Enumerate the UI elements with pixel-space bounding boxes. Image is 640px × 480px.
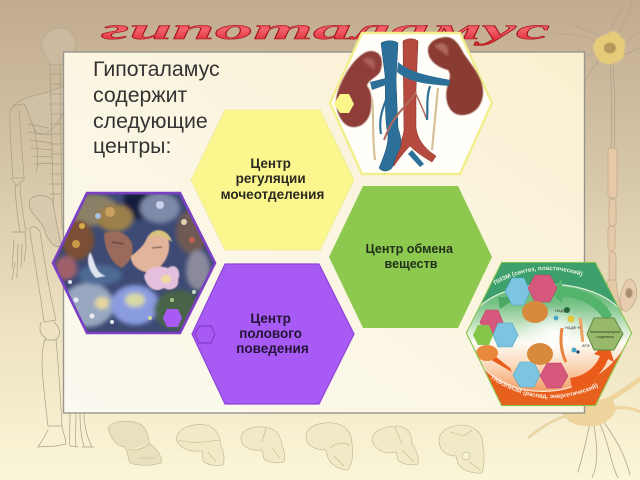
skull 1	[108, 421, 161, 465]
green low molecular hexagon	[587, 318, 623, 350]
small molecules	[564, 307, 570, 313]
skull 6	[439, 425, 484, 473]
band label catabolism: ТАБОЛИЗМ (распад, энергетический)	[491, 374, 598, 400]
panel: yellow hexagon, urination centre: регуляции	[236, 171, 306, 186]
skull 2	[176, 425, 224, 466]
axon myelin sheath	[607, 148, 622, 314]
flower	[144, 266, 179, 290]
illustration: neuron	[528, 4, 640, 478]
neuron cell body top	[593, 31, 625, 65]
panel: painting of kissing couple	[50, 190, 220, 336]
aorta	[393, 38, 436, 166]
panel: metabolism diagram: Низкомолекулярные	[590, 330, 620, 334]
panel: purple hexagon, sexual behaviour centre: поведения	[236, 341, 309, 356]
title: гипоталамус	[101, 13, 550, 46]
skull 4	[306, 423, 353, 470]
panel: green hexagon, metabolism centre	[329, 186, 492, 328]
intro text: содержит	[93, 83, 188, 107]
panel: metabolism diagram	[466, 262, 632, 406]
intro text: следующие	[93, 109, 208, 133]
intro text: центры:	[93, 134, 171, 158]
painting details	[68, 201, 196, 324]
panel: metabolism diagram: НАДФ	[555, 308, 566, 313]
right kidney	[428, 37, 483, 115]
panel: green hexagon, metabolism centre: веществ	[385, 257, 438, 271]
neuron cell body bottom	[528, 379, 640, 438]
panel: kidneys image hexagon	[330, 33, 492, 174]
ureters	[372, 88, 438, 160]
small yellow hexagon marker	[334, 94, 354, 113]
pink and blue hexagons	[480, 275, 568, 388]
small purple hexagon marker	[163, 309, 182, 327]
skull 3	[241, 427, 285, 463]
panel: green hexagon, metabolism centre: Центр обмена	[365, 242, 454, 256]
orange arrow	[570, 350, 614, 388]
faces	[104, 231, 133, 268]
panel: purple hexagon, sexual behaviour centre: Центр	[250, 311, 291, 326]
band label anabolism: ПИЗМ (синтез, пластический)	[493, 266, 582, 285]
vena cava	[379, 41, 401, 171]
illustration: skeleton	[10, 28, 94, 447]
panel: yellow hexagon, urination centre	[191, 110, 354, 250]
small green hexagon marker	[473, 325, 493, 345]
intro text: Гипоталамус	[93, 57, 220, 81]
content panel	[64, 52, 584, 413]
renal veins	[397, 62, 450, 86]
orange molecule blobs	[522, 301, 548, 323]
green arrow	[554, 279, 612, 318]
skull 5	[372, 426, 418, 465]
satellite cell	[620, 279, 637, 311]
panel: metabolism diagram: соединения	[596, 335, 614, 339]
left kidney	[336, 51, 382, 127]
small outlined hexagon marker	[195, 326, 215, 343]
panel: metabolism diagram: НАДФ·Н	[565, 325, 581, 330]
panel: yellow hexagon, urination centre: Центр	[250, 156, 291, 171]
panel: metabolism diagram: АТФ	[582, 343, 590, 348]
vertical mini arrows	[579, 318, 584, 342]
panel: purple hexagon, sexual behaviour centre: полового	[239, 326, 302, 341]
panel: yellow hexagon, urination centre: мочеотделения	[221, 187, 324, 202]
illustration: row of skulls	[108, 421, 484, 473]
panel: purple hexagon, sexual behaviour centre	[192, 264, 354, 404]
